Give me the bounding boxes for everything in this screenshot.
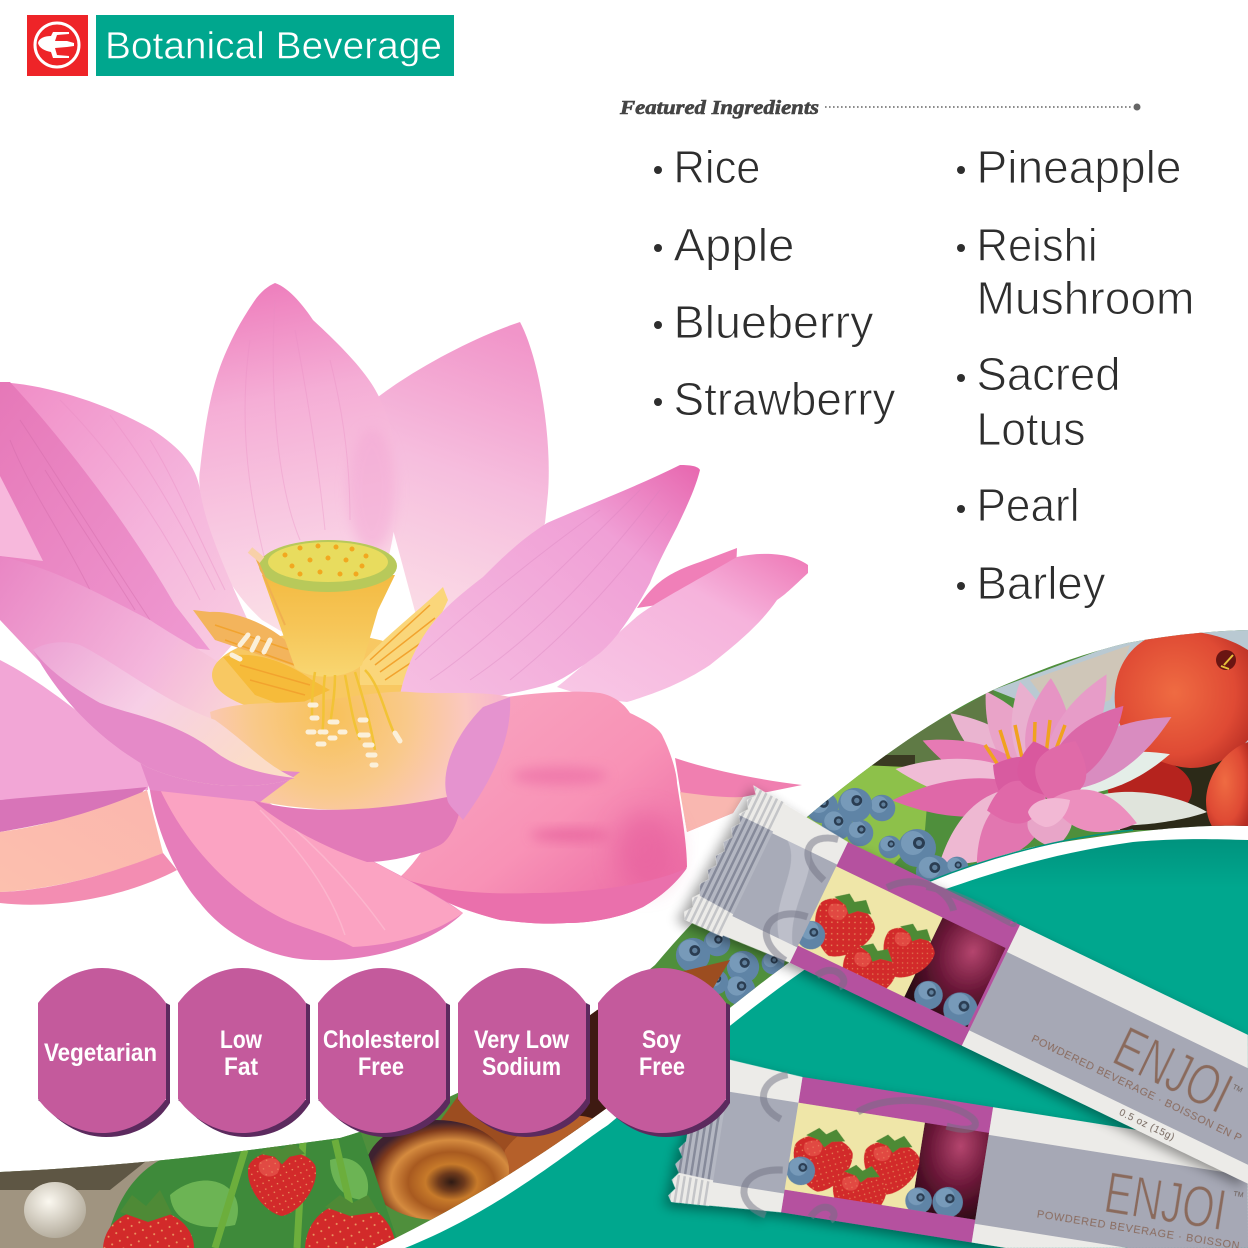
badge: Low Fat: Fat — [224, 1053, 259, 1081]
ingredients list: left column: Blueberry — [674, 296, 874, 348]
lower left pink edge — [0, 853, 177, 905]
badge: Cholesterol Free — [318, 968, 450, 1137]
hanging stamens with anthers — [232, 635, 400, 765]
lower left peach petal — [0, 790, 163, 892]
badge: Very Low Sodium: Very Low — [474, 1026, 569, 1054]
blueberries — [676, 788, 968, 1005]
header: logo — [27, 15, 88, 76]
packet body — [667, 1051, 1248, 1248]
crimped end grey — [694, 813, 773, 914]
lower left magenta petal — [0, 660, 150, 800]
ingredients list: right column: Sacred — [976, 348, 1120, 400]
right lobe of cup — [445, 697, 510, 820]
lotus flower — [0, 283, 808, 960]
grey label — [975, 1135, 1248, 1248]
water lily — [892, 674, 1207, 864]
ingredients list: left column: Strawberry — [674, 373, 896, 425]
rings — [758, 827, 1014, 1043]
crimped end light — [667, 1174, 713, 1208]
crimped end — [674, 1085, 727, 1180]
badge: Soy Free: Soy — [642, 1026, 681, 1054]
strawberries and leaves — [103, 1130, 400, 1248]
badge: Soy Free — [598, 968, 730, 1137]
badge: Cholesterol Free: Free — [358, 1053, 404, 1081]
pearl in shell — [0, 1160, 166, 1248]
ingredients list: left column: Apple — [674, 219, 794, 271]
trademark: TM — [1231, 1084, 1244, 1095]
curled left petal — [33, 642, 295, 786]
top center petal — [199, 283, 397, 660]
apples — [1115, 631, 1248, 830]
cup lower band — [253, 797, 462, 862]
gap filler under curled petal — [140, 762, 300, 802]
product description: POWDERED BEVERAGE · BOISSON EN P — [1029, 1033, 1244, 1145]
crimped end light bottom — [681, 893, 734, 938]
ingredient photo band — [0, 625, 1248, 1248]
ingredients list: right column: Lotus — [976, 403, 1086, 455]
featured ingredients heading — [619, 97, 1140, 119]
grey panel left — [713, 1091, 798, 1194]
product photo — [784, 1102, 989, 1220]
net weight: 0.5 oz (15g) — [1117, 1107, 1176, 1143]
badge: Very Low Sodium — [458, 968, 590, 1137]
badge: Cholesterol Free: Cholesterol — [323, 1026, 440, 1054]
ingredients list: left column — [654, 141, 896, 425]
magenta band — [790, 842, 1020, 1046]
badge: Soy Free: Free — [639, 1053, 685, 1081]
central cup — [210, 692, 510, 810]
badge: Low Fat: Low — [220, 1026, 262, 1054]
header: title bar — [96, 15, 454, 76]
left dark petal — [0, 382, 210, 650]
ingredients list: right column: Pineapple — [976, 141, 1182, 193]
badge: Vegetarian — [38, 968, 170, 1137]
teal background swoosh — [405, 839, 1248, 1248]
badge: Vegetarian: Vegetarian — [44, 1039, 157, 1067]
ingredients list: right column — [957, 141, 1194, 609]
ingredients list: left column: Rice — [674, 141, 760, 193]
band edge line — [930, 830, 1133, 881]
grey panel left — [732, 833, 837, 947]
featured ingredients heading: Featured Ingredients — [619, 97, 819, 119]
front right petal — [400, 465, 700, 701]
ingredients list: right column: Mushroom — [976, 272, 1194, 324]
packet 1 — [681, 782, 1248, 1190]
badge: Very Low Sodium: Sodium — [482, 1053, 561, 1081]
crimped end light top — [739, 786, 787, 831]
large front right petal — [400, 692, 687, 924]
ingredients list: right column: Reishi — [976, 219, 1098, 271]
lower front petal — [148, 773, 463, 960]
trademark: TM — [1233, 1191, 1244, 1199]
lower left band — [0, 787, 147, 832]
ingredients list: right column: Pearl — [976, 479, 1080, 531]
yellow centre backing — [212, 633, 428, 717]
upper left outer petal — [0, 382, 250, 670]
sky and background — [807, 630, 1248, 864]
packet body — [681, 782, 1248, 1190]
header: title bar: Botanical Beverage — [105, 26, 442, 68]
back bottom-right petal — [675, 758, 802, 832]
mid left petal — [0, 556, 300, 770]
top right back petal — [378, 322, 549, 630]
badge: Low Fat — [178, 968, 310, 1137]
far right petals — [557, 548, 808, 702]
product photo — [798, 866, 1006, 1028]
packet 2 — [667, 1051, 1248, 1248]
stamens and seed pod — [193, 540, 448, 708]
ingredients list: right column: Barley — [976, 557, 1106, 609]
reishi mushrooms — [365, 960, 730, 1220]
grey panel highlight — [748, 841, 833, 945]
magenta band — [781, 1077, 993, 1243]
grey label — [969, 952, 1248, 1165]
rings — [741, 1071, 978, 1245]
